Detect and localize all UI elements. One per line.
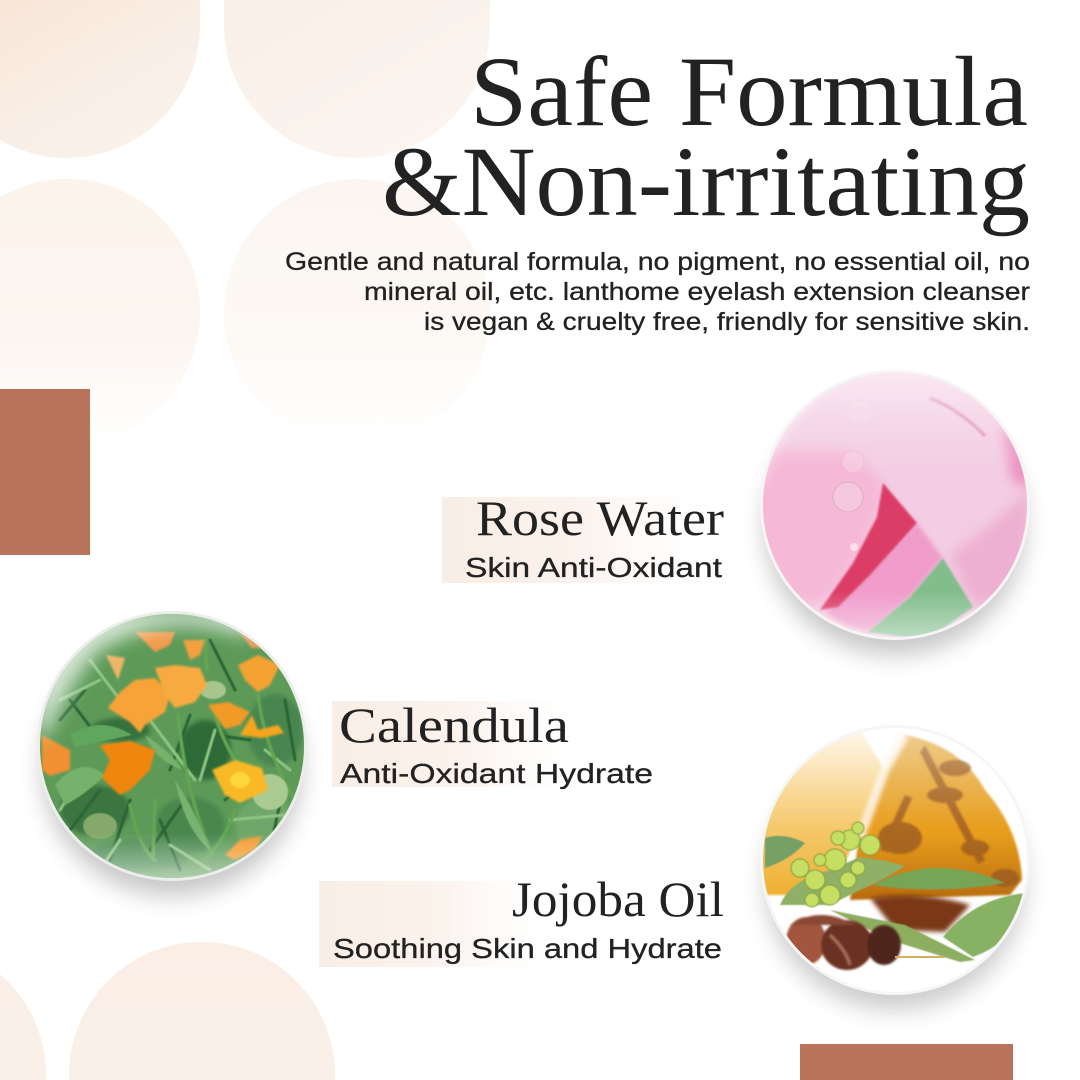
label: calendula (332, 697, 653, 789)
description text: is vegan & cruelty free, friendly for sensitive skin. (424, 308, 1030, 336)
background circles (0, 0, 490, 1080)
title (382, 36, 1030, 237)
description text: Gentle and natural formula, no pigment, no essential oil, no (285, 248, 1030, 276)
label: calendula: Anti-Oxidant Hydrate (340, 758, 653, 789)
label: jojoba oil: Soothing Skin and Hydrate (333, 933, 722, 964)
title: &Non-irritating (382, 126, 1030, 237)
label: jojoba oil (319, 871, 724, 967)
icon: jojoba oil photo circle (758, 725, 1030, 1010)
label: calendula: Calendula (339, 697, 569, 753)
icon: calendula photo circle (37, 610, 307, 896)
accent block left (0, 389, 90, 555)
label: jojoba oil: Jojoba Oil (512, 871, 724, 927)
title: Safe Formula (470, 36, 1028, 147)
icon: rose water photo circle (750, 370, 1030, 655)
description text: mineral oil, etc. lanthome eyelash extension cleanser (364, 278, 1030, 306)
description text (285, 248, 1030, 336)
label: rose water: Rose Water (476, 490, 724, 546)
accent block bottom (800, 1044, 1013, 1080)
label: rose water (442, 490, 727, 583)
label: rose water: Skin Anti-Oxidant (465, 552, 722, 583)
